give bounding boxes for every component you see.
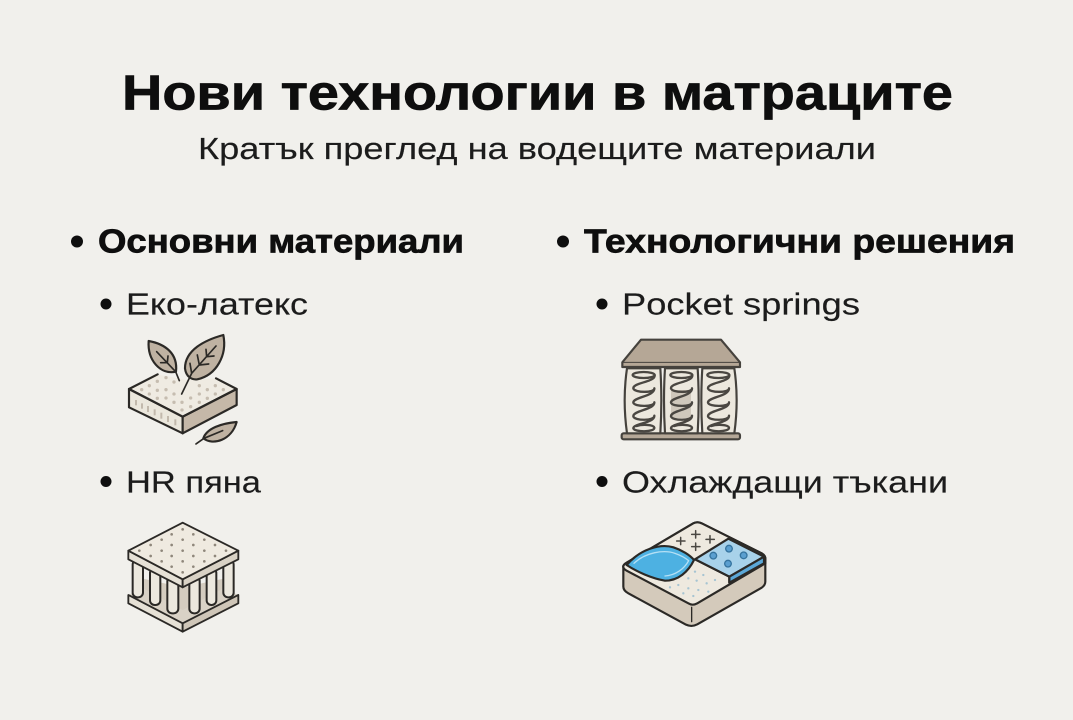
icon: cooling fabric block [623,522,765,626]
title: Нови технологии в матраците [122,66,953,120]
list item: eco latex: Еко-латекс [126,286,308,322]
list item: cooling fabrics: Охлаждащи тъкани [622,464,948,500]
list item: pocket springs: Pocket springs [622,286,860,322]
subtitle: Кратък преглед на водещите материали [198,131,876,166]
icon: pocket springs [622,340,740,439]
icon: latex block with leaves [129,335,237,444]
heading: main materials: Основни материали [98,222,464,260]
column: main materials [71,222,464,632]
list item: HR foam: HR пяна [126,464,262,500]
heading: technology solutions: Технологични решения [584,222,1015,260]
column: technology solutions [557,222,1015,626]
icon: HR foam block with columns [128,523,238,632]
